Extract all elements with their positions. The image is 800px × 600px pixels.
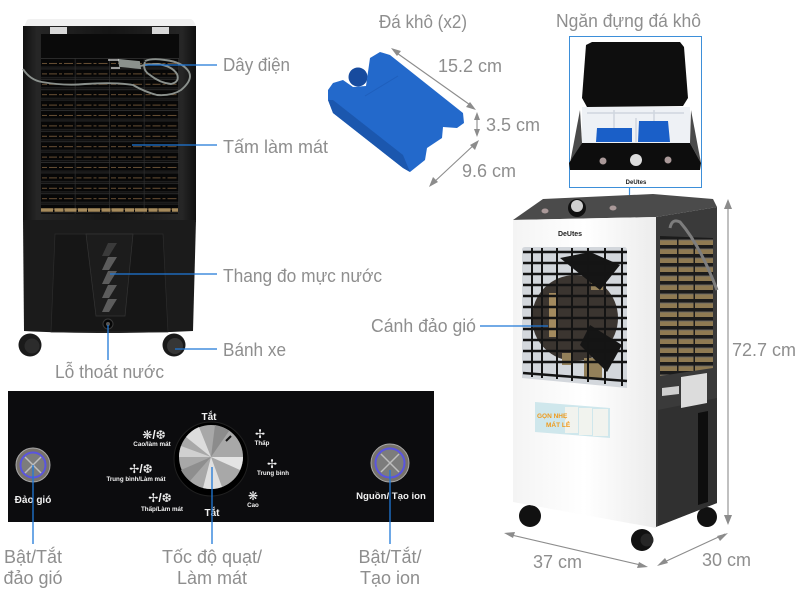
fan and pad behind grid xyxy=(532,252,622,378)
side sticker xyxy=(681,373,707,408)
barcode xyxy=(662,386,679,396)
label: swing: Đảo gió xyxy=(15,495,51,506)
mode: low and cool xyxy=(141,491,183,513)
mode: high xyxy=(247,489,259,509)
mode: medium: ✢ xyxy=(267,457,277,471)
inset frame xyxy=(570,36,702,188)
left wheel xyxy=(18,334,42,356)
drain hole xyxy=(103,319,113,329)
ice compartment inset xyxy=(569,36,702,188)
leader: drain xyxy=(107,325,109,360)
control panel xyxy=(8,391,434,522)
feature sticker: MÁT LẺ xyxy=(546,420,571,429)
mode: low xyxy=(255,427,270,447)
open lid xyxy=(582,42,688,107)
mode: medium and cool: ✢/❆ xyxy=(129,462,153,476)
mode: low: ✢ xyxy=(255,427,265,441)
label: ice pack: Đá khô (x2) xyxy=(379,12,467,32)
mode: high: ❋ xyxy=(248,489,258,503)
right wheel xyxy=(162,334,186,356)
label: swing toggle: Bật/Tắt xyxy=(4,547,62,567)
label: off bottom: Tắt xyxy=(204,506,220,519)
back view of cooler xyxy=(18,19,196,356)
leader: louver xyxy=(480,325,548,327)
water level trapezoid xyxy=(86,234,133,316)
label: cooling pad: Tấm làm mát xyxy=(223,137,328,157)
tray divider xyxy=(587,110,684,142)
dimension: depth xyxy=(657,533,728,566)
leader: wheel xyxy=(175,348,217,350)
leader: cooling pad xyxy=(132,144,217,146)
leader: swing xyxy=(32,465,34,544)
label: wheel: Bánh xe xyxy=(223,340,286,360)
lower slot xyxy=(698,411,708,505)
dimension: thickness xyxy=(474,112,480,137)
mode: medium xyxy=(257,457,289,477)
label: thickness: 3.5 cm xyxy=(486,115,540,135)
label: width: 9.6 cm xyxy=(462,161,516,181)
rear wheel xyxy=(697,507,717,527)
dimension: height xyxy=(724,199,732,525)
base inner panel xyxy=(51,234,168,332)
right power button xyxy=(371,444,409,482)
front wheel xyxy=(631,529,654,551)
label: front width: 37 cm xyxy=(533,552,582,572)
cooling pad grille xyxy=(41,34,179,214)
label: ion toggle: Bật/Tắt/ xyxy=(358,547,422,567)
label: depth: 30 cm xyxy=(702,550,751,570)
white top cap xyxy=(24,19,196,27)
label: ion toggle: Tạo ion xyxy=(360,568,420,588)
mode: low and cool: Thấp/Làm mát xyxy=(141,506,183,513)
mode: low: Thấp xyxy=(255,440,270,447)
ice packs in tray xyxy=(596,121,670,142)
top handles xyxy=(50,27,169,34)
top knob and buttons xyxy=(542,199,616,217)
white tray xyxy=(582,107,690,144)
mode: high and cool xyxy=(133,428,172,448)
leader: water level xyxy=(110,273,217,275)
dimension: length xyxy=(391,48,476,110)
brand: DeUtes xyxy=(626,180,647,186)
front fan window xyxy=(522,247,627,388)
dimension: front width xyxy=(504,532,648,568)
mode: low and cool: ✢/❆ xyxy=(148,491,172,505)
label: drain: Lỗ thoát nước xyxy=(55,361,164,382)
front view of cooler xyxy=(513,194,717,551)
mode: high and cool: ❋/❆ xyxy=(142,428,166,442)
black upper body xyxy=(23,26,196,222)
label: height: 72.7 cm xyxy=(732,340,796,360)
label: swing toggle: đảo gió xyxy=(3,568,63,588)
label: water level: Thang đo mực nước xyxy=(223,266,382,286)
side panel xyxy=(656,207,717,527)
brand: DeUtes xyxy=(558,231,582,238)
lower black base xyxy=(23,220,196,333)
label: length: 15.2 cm xyxy=(438,56,502,76)
label: fan speed: Tốc độ quạt/ xyxy=(162,547,262,567)
label: ice compartment: Ngăn đựng đá khô xyxy=(556,11,701,31)
label: fan speed: Làm mát xyxy=(177,568,247,588)
panel background xyxy=(8,391,434,522)
mode: medium and cool xyxy=(106,462,166,483)
connector line xyxy=(628,188,630,195)
leader: ion xyxy=(389,470,391,544)
mode: high: Cao xyxy=(247,502,259,509)
ice pack xyxy=(328,52,464,172)
grid bars xyxy=(523,248,627,386)
mode: high and cool: Cao/làm mát xyxy=(133,441,172,448)
side cord xyxy=(670,221,717,290)
knob xyxy=(174,422,248,496)
label: off top: Tắt xyxy=(202,410,217,423)
label: power ion: Nguồn/ Tạo ion xyxy=(356,491,426,502)
mode: medium and cool: Trung bình/Làm mát xyxy=(106,476,166,483)
left wheel xyxy=(519,505,541,527)
dimension: width xyxy=(429,140,479,187)
label: power cord: Dây điện xyxy=(223,55,290,75)
front control strip xyxy=(569,143,701,170)
feature sticker: GỌN NHẸ xyxy=(537,413,568,420)
small controls xyxy=(600,154,672,166)
side shells xyxy=(570,110,701,163)
leader: fan speed xyxy=(211,467,213,544)
feature sticker xyxy=(535,402,610,438)
top surface xyxy=(513,194,717,220)
water level slats xyxy=(102,243,117,312)
leader: power cord xyxy=(145,64,217,66)
label: louver: Cánh đảo gió xyxy=(371,316,476,336)
white front xyxy=(513,217,656,528)
left swing button xyxy=(16,448,50,482)
lower side pocket xyxy=(658,398,717,526)
power cord xyxy=(23,59,190,95)
mode: medium: Trung bình xyxy=(257,470,289,477)
side grille xyxy=(660,236,713,376)
